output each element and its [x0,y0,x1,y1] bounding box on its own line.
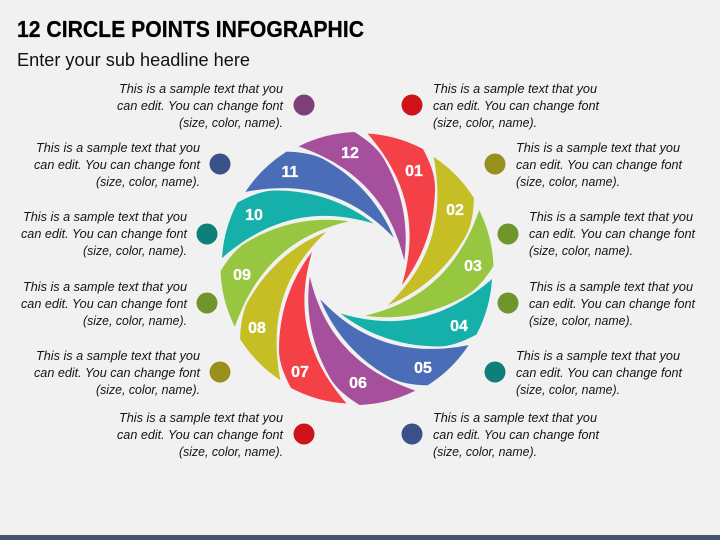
callout 05: (size, color, name). [516,383,620,397]
callout 11 [34,141,230,189]
number 09: 09 [233,267,251,284]
callout 01: (size, color, name). [433,116,537,130]
footer bar [0,535,720,540]
callout 04: This is a sample text that you [529,280,693,294]
callout 03: (size, color, name). [529,244,633,258]
callout 11: This is a sample text that you [36,141,200,155]
callout 04: (size, color, name). [529,314,633,328]
number 02: 02 [446,202,464,219]
number 01: 01 [405,163,423,180]
callout 07: can edit. You can change font [117,428,284,442]
callout 05 [484,349,683,397]
callout 10 [21,210,218,258]
segment 09 [201,193,366,327]
callout 11: (size, color, name). [96,175,200,189]
segment 11 [245,133,410,268]
callout 12: This is a sample text that you [119,82,283,96]
number 03: 03 [464,258,482,275]
callout 01 [402,82,600,130]
callout 09: can edit. You can change font [21,297,188,311]
callout 03: can edit. You can change font [529,227,696,241]
number 08: 08 [248,320,266,337]
callout 01: This is a sample text that you [433,82,597,96]
callout 01: can edit. You can change font [433,99,600,113]
callout 08: This is a sample text that you [36,349,200,363]
callout 08 [34,349,230,397]
segment 08 [222,215,356,380]
spiral wheel [201,113,513,424]
segment 05 [304,269,469,404]
callout 06: can edit. You can change font [433,428,600,442]
callout 02: can edit. You can change font [516,158,683,172]
number 10: 10 [245,207,263,224]
title: 12 CIRCLE POINTS INFOGRAPHIC [17,16,364,42]
callout 08: can edit. You can change font [34,366,201,380]
segment 10 [222,190,374,258]
callout 03: This is a sample text that you [529,210,693,224]
callout 07: (size, color, name). [179,445,283,459]
callout 07: This is a sample text that you [119,411,283,425]
callout 03 [498,210,696,258]
subtitle: Enter your sub headline here [17,50,250,70]
segment 07 [279,252,346,404]
callout 10: can edit. You can change font [21,227,188,241]
callout 04 [498,280,696,328]
callout 06: This is a sample text that you [433,411,597,425]
callout 09: (size, color, name). [83,314,187,328]
number 12: 12 [341,145,359,162]
segment 01 [368,134,435,285]
callout 02: (size, color, name). [516,175,620,189]
callout 09 [21,280,218,328]
callout 05: This is a sample text that you [516,349,680,363]
callout 11: can edit. You can change font [34,158,201,172]
number 05: 05 [414,360,432,377]
number 06: 06 [349,375,367,392]
callout 06: (size, color, name). [433,445,537,459]
callout 10: (size, color, name). [83,244,187,258]
number 11: 11 [282,164,299,181]
callout 12: (size, color, name). [179,116,283,130]
callout 05: can edit. You can change font [516,366,683,380]
callout 10: This is a sample text that you [23,210,187,224]
number 04: 04 [450,318,468,335]
segment 02 [358,157,492,322]
callout 07 [117,411,314,459]
callout 09: This is a sample text that you [23,280,187,294]
segment 12 [299,113,433,278]
segment 04 [340,279,492,346]
segment 06 [281,259,415,424]
callout 08: (size, color, name). [96,383,200,397]
number 07: 07 [291,364,309,381]
segment 03 [348,210,513,344]
callout 02: This is a sample text that you [516,141,680,155]
callout 02 [484,141,683,189]
callout 12 [117,82,314,130]
callout 06 [402,411,600,459]
callout 12: can edit. You can change font [117,99,284,113]
callout 04: can edit. You can change font [529,297,696,311]
